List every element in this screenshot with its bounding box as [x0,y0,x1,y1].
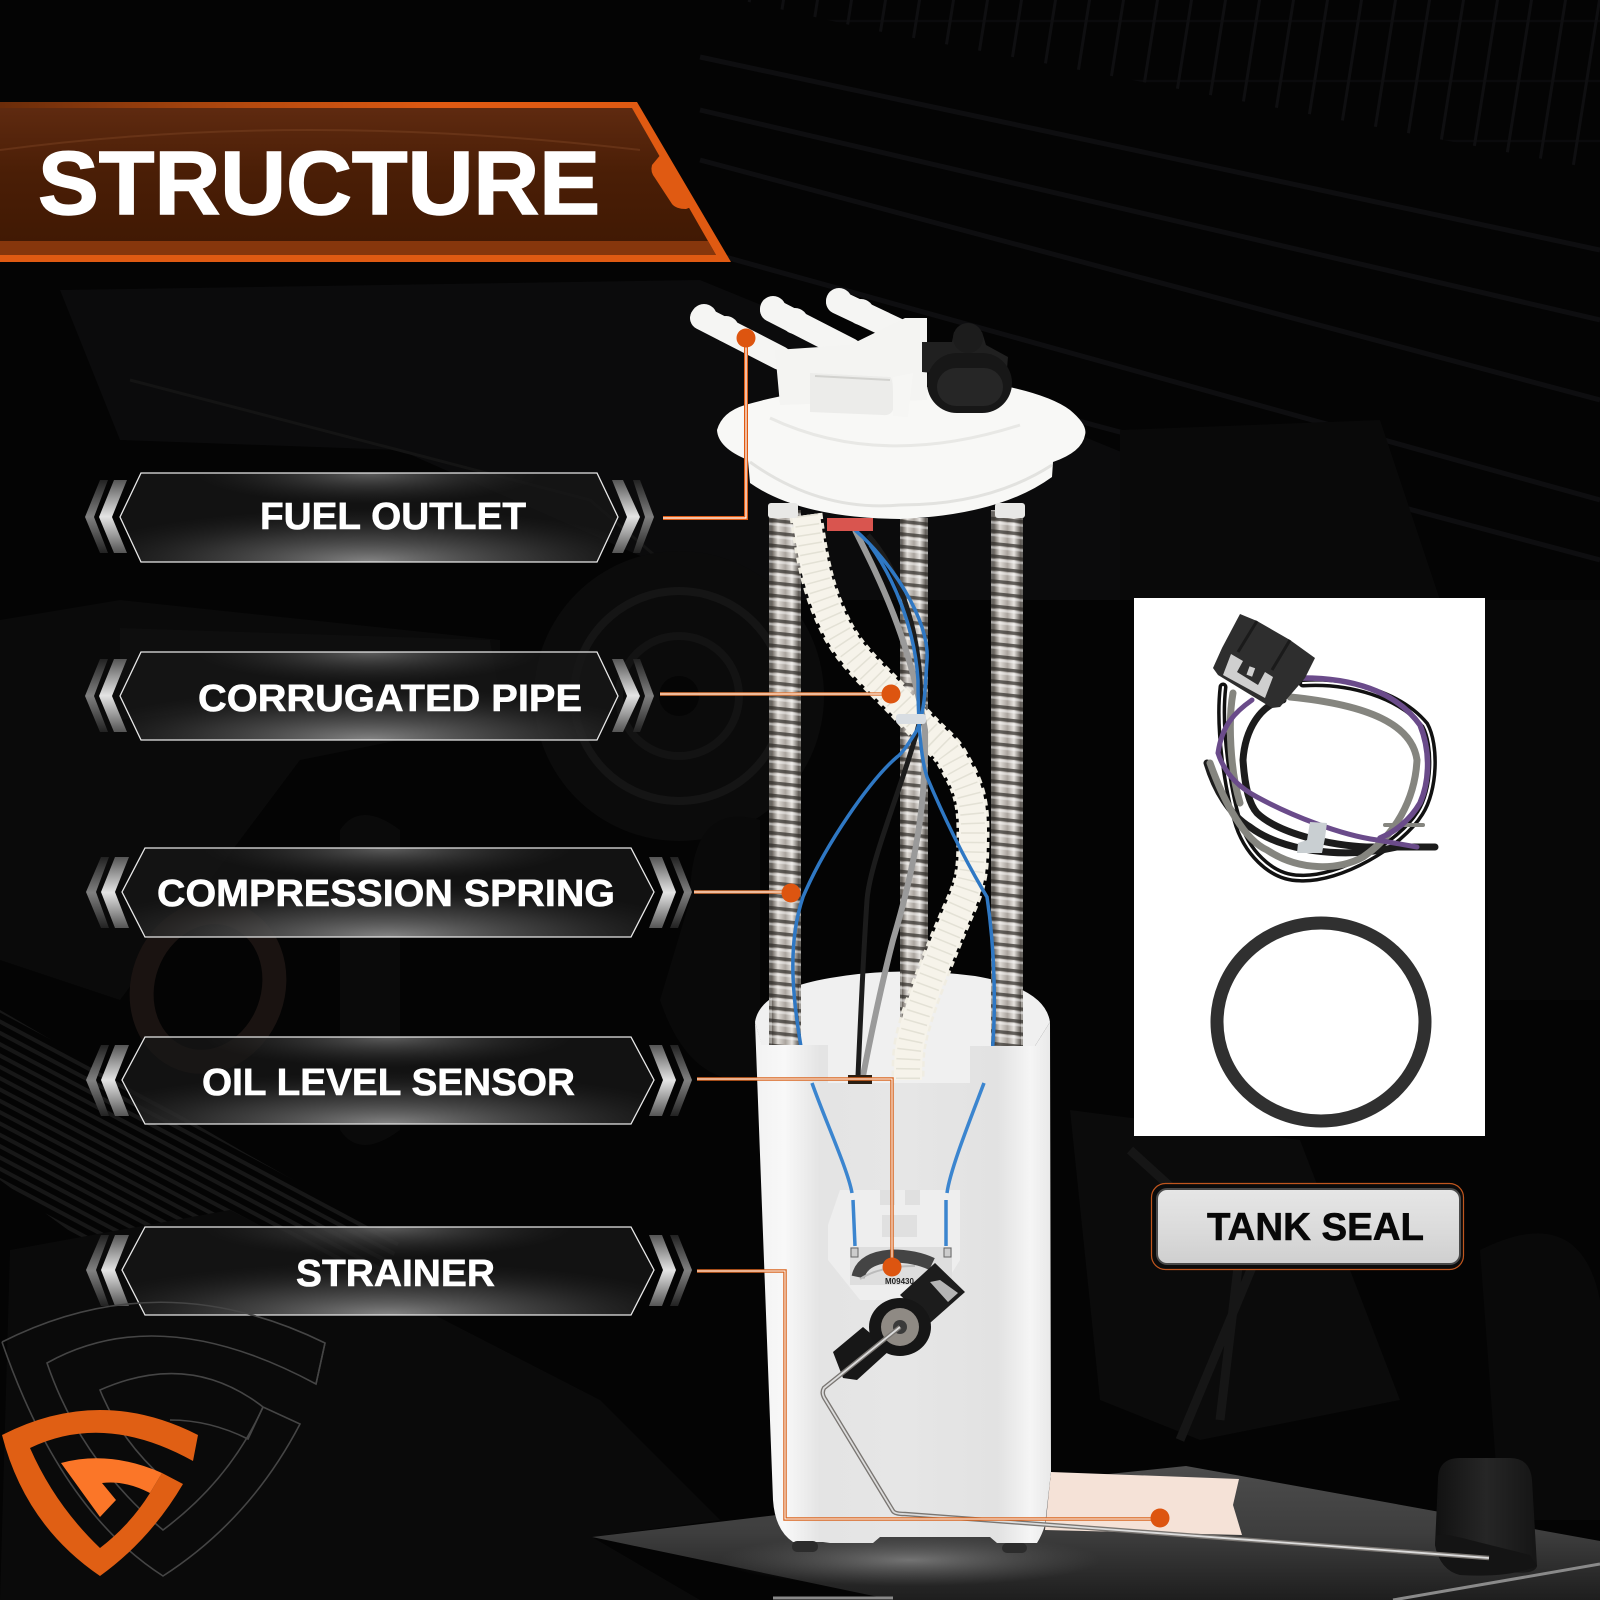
leader: strainer [697,1271,1170,1528]
corrugated pipe [806,515,973,1080]
label: corrugated pipe: CORRUGATED PIPE [198,678,582,720]
label: compression spring [86,848,692,937]
wires [793,530,994,1076]
sensor card: M09430 [885,1277,914,1286]
float arm pivot [833,1263,965,1380]
label: oil level sensor: OIL LEVEL SENSOR [202,1062,575,1104]
sensor card [850,1247,952,1286]
title banner [0,102,731,262]
tank seal ring [1217,923,1425,1121]
wiring harness [1207,678,1435,878]
black connector [922,323,1012,413]
top flange [717,385,1085,519]
product: platform surface [592,1466,1600,1600]
float [1435,1458,1537,1576]
spring: center [900,518,928,1023]
label: tank seal [1152,1184,1464,1270]
leader: compression spring [694,884,800,902]
float rod [823,1327,1489,1558]
logo outline shield [2,1302,325,1576]
spring: left [769,510,801,1055]
product: fuel pump module [691,288,1537,1576]
leader: oil level sensor [697,1079,902,1276]
label: fuel outlet: FUEL OUTLET [260,496,526,538]
label: fuel outlet [85,473,654,562]
strainer [1045,1472,1242,1535]
hose nipples [691,288,910,358]
logo orange G outer [2,1410,198,1576]
title text: STRUCTURE [38,134,600,234]
logo orange G inner [61,1458,162,1517]
black grommet [848,1075,872,1084]
brand logo [2,1302,325,1576]
wire clip [1297,822,1327,853]
panel: accessories [1134,598,1485,1136]
label: compression spring: COMPRESSION SPRING [157,873,615,915]
canister front wall [755,1022,1051,1543]
sensor clip [828,1190,960,1300]
canister back wall [755,971,1050,1083]
feet [792,1541,1027,1553]
leader: corrugated pipe [660,684,900,704]
label: corrugated pipe [85,652,654,740]
leader: fuel outlet [663,328,756,518]
connector plug [1213,614,1315,708]
cable tie [896,714,926,724]
white electrical connector [810,373,913,417]
spring: right [991,510,1023,1055]
label: strainer: STRAINER [296,1253,495,1295]
label: strainer [86,1227,692,1315]
lower blue wires [812,1083,984,1246]
outlet block [775,318,927,405]
label: tank seal: TANK SEAL [1207,1206,1424,1249]
label: oil level sensor [86,1037,692,1124]
red connector [827,518,873,531]
